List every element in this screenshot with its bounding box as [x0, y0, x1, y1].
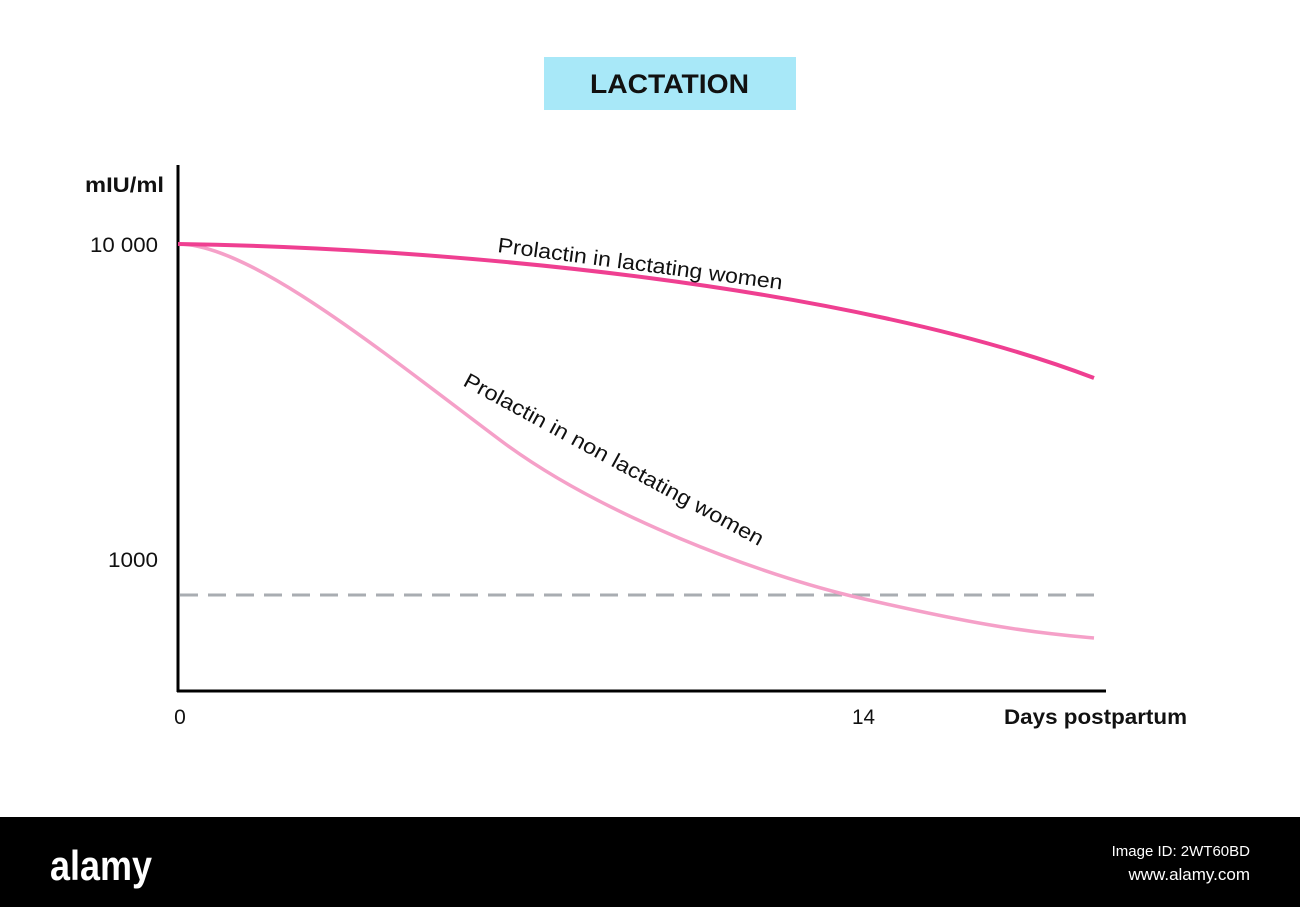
title: [544, 57, 796, 110]
curve: non lactating: [178, 244, 1094, 638]
label: lactating: Prolactin in lactating women: [496, 234, 784, 294]
x tick 14: 14: [852, 706, 875, 729]
y tick 10000: 10 000: [90, 234, 158, 257]
y axis label: mIU/ml: [85, 174, 164, 197]
footer bar: [0, 817, 1300, 907]
axes: [177, 165, 1106, 692]
title: LACTATION: [590, 69, 749, 99]
reference dashed line: [180, 594, 1094, 596]
x axis label: Days postpartum: [1004, 706, 1187, 729]
footer bar: www.alamy.com: [1127, 865, 1250, 884]
footer bar: Image ID: 2WT60BD: [1112, 843, 1250, 860]
footer bar: alamy: [50, 842, 153, 889]
curve: lactating: [178, 244, 1094, 378]
x tick 0: 0: [174, 706, 186, 729]
y tick 1000: 1000: [108, 549, 158, 572]
label: non lactating: Prolactin in non lactating women: [460, 369, 768, 551]
